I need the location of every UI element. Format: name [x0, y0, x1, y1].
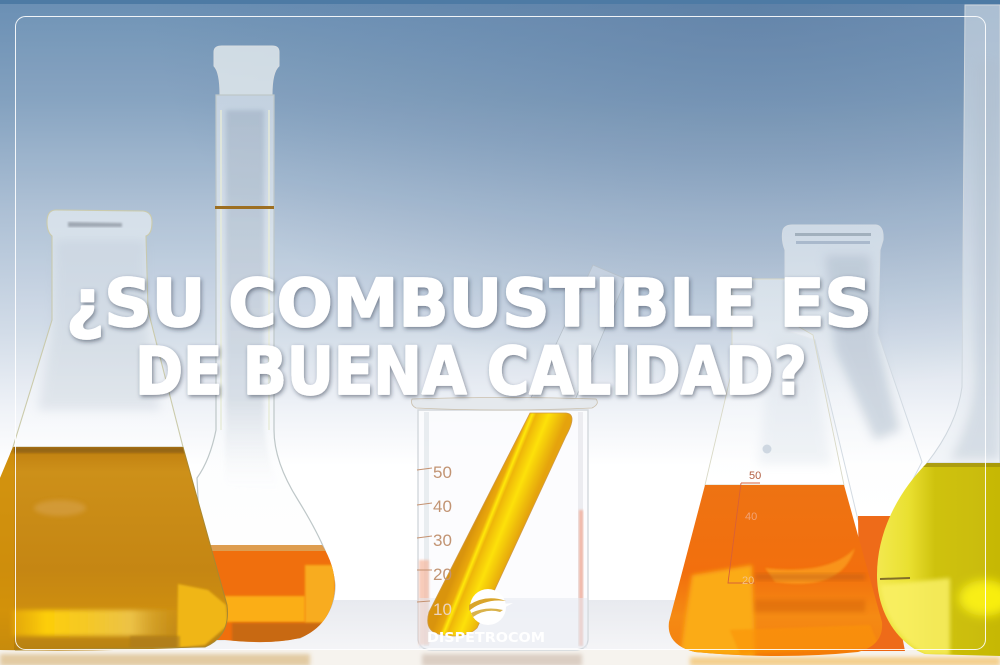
back flask orange liquid — [858, 516, 905, 651]
orange liquid — [210, 545, 335, 642]
right yellow flask — [870, 5, 1000, 660]
printed scale: 50 — [749, 470, 761, 482]
right conical orange flask — [660, 279, 890, 660]
graduation marks: 30 — [433, 531, 452, 550]
yellow test tube — [428, 413, 572, 636]
graduation marks — [417, 463, 452, 619]
glass rod of test tube above the beaker — [530, 265, 626, 400]
printed scale: 20 — [742, 575, 754, 587]
graduation marks: 10 — [433, 600, 452, 619]
flask glass — [705, 279, 844, 485]
title: ¿SU COMBUSTIBLE ES — [66, 265, 872, 342]
printed scale: 40 — [745, 511, 757, 523]
printed scale — [728, 470, 761, 587]
beaker with test tube — [412, 265, 626, 650]
neck glass — [927, 5, 1000, 463]
Dispetrocom logo — [427, 589, 545, 646]
graduation marks: 50 — [433, 463, 452, 482]
yellow liquid — [870, 460, 1000, 660]
logo wordmark: DISPETROCOM — [427, 630, 545, 646]
amber liquid — [0, 445, 240, 652]
logo globe with swoosh — [469, 589, 513, 625]
meniscus mark — [215, 206, 274, 209]
flask glass — [13, 210, 183, 447]
graduation marks: 20 — [433, 565, 452, 584]
stopper — [214, 46, 279, 95]
left conical flask — [0, 210, 240, 652]
back right flask — [782, 225, 922, 651]
beaker glass — [418, 410, 588, 650]
frosted stem core — [225, 110, 285, 495]
title — [66, 265, 872, 410]
beaker rim — [412, 398, 597, 410]
neck and bulb glass — [197, 95, 335, 640]
glass reflections on the table — [0, 654, 1000, 665]
orange liquid — [660, 485, 890, 660]
graduation marks: 40 — [433, 497, 452, 516]
volumetric flask — [197, 46, 340, 645]
title: DE BUENA CALIDAD? — [135, 333, 807, 410]
